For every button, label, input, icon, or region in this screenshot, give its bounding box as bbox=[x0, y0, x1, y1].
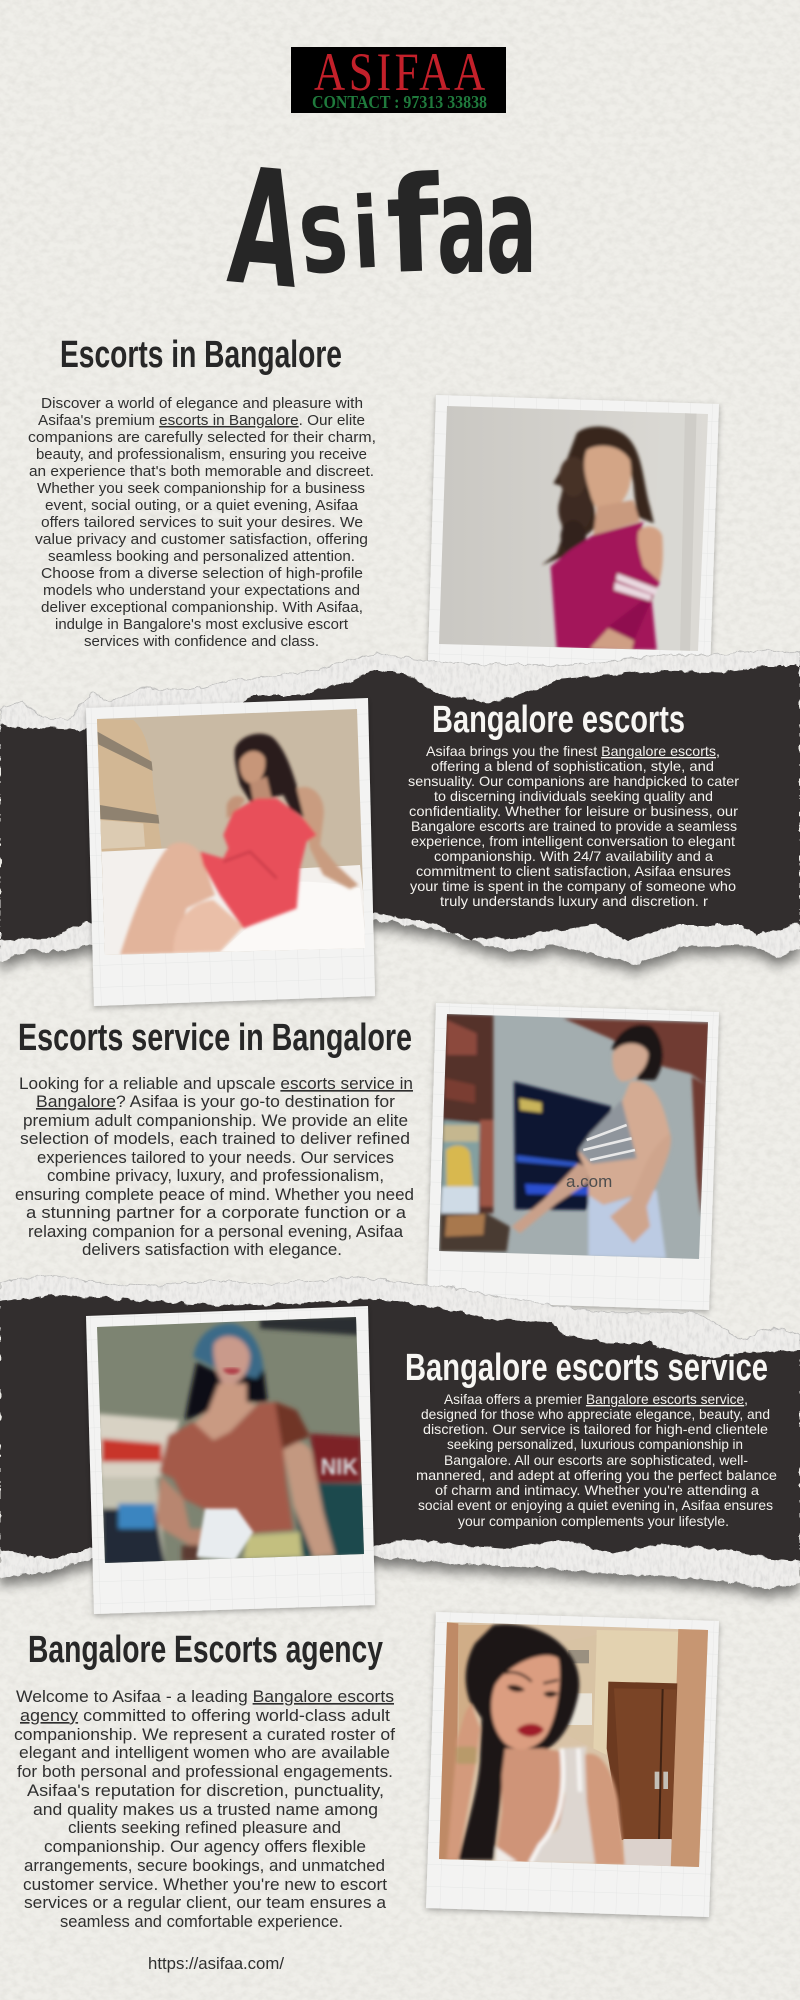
section 2 body text: confidentiality. Whether for leisure or business, our bbox=[409, 803, 738, 819]
section 3 body text: experiences tailored to your needs. Our services bbox=[37, 1149, 394, 1167]
torn band 1: paper strip top bbox=[0, 651, 800, 760]
section 5 body text: elegant and intelligent women who are available bbox=[19, 1744, 390, 1762]
website url: https://asifaa.com/ bbox=[148, 1955, 284, 1973]
section 3 heading: Escorts service in Bangalore bbox=[18, 1017, 412, 1059]
section 1 body text: indulge in Bangalore's most exclusive escort bbox=[55, 616, 349, 633]
logo banner: ASIFAA bbox=[314, 41, 485, 102]
logo banner: CONTACT : 97313 33838 bbox=[312, 92, 487, 112]
section 4 body text: Bangalore. All our escorts are sophisticated, well- bbox=[444, 1452, 748, 1468]
section 1 body text: Whether you seek companionship for a business bbox=[37, 480, 365, 497]
torn band 2: paper strip top bbox=[0, 1275, 800, 1390]
photo 1: woman in magenta top bbox=[439, 406, 708, 651]
section 1 body text: value privacy and customer satisfaction, offering bbox=[35, 531, 368, 548]
section 2 body text: to discerning individuals seeking quality and bbox=[434, 788, 713, 804]
section 3 body text: Looking for a reliable and upscale escorts service in bbox=[19, 1075, 413, 1093]
section 5 body text: for both personal and professional engagements. bbox=[17, 1763, 393, 1781]
section 4 body text: designed for those who appreciate elegance, beauty, and bbox=[421, 1406, 770, 1422]
section 4 body text: of charm and intimacy. Whether you're attending a bbox=[435, 1482, 759, 1498]
section 2 body text: offering a blend of sophistication, style, and bbox=[431, 758, 714, 774]
torn band 2: paper strip bottom bbox=[0, 1530, 800, 1589]
title: Asifaa: a bbox=[486, 146, 537, 304]
section 1 body text: seamless booking and personalized attention. bbox=[48, 548, 355, 565]
section 4 body text: discretion. Our service is tailored for high-end clientele bbox=[423, 1421, 768, 1437]
section 1 body text: models who understand your expectations and bbox=[43, 582, 360, 599]
section 1 body text: Discover a world of elegance and pleasure with bbox=[41, 395, 363, 412]
section 2 body text bbox=[408, 743, 739, 909]
section 5 body text: customer service. Whether you're new to escort bbox=[23, 1876, 387, 1894]
section 3 body text: combine privacy, luxury, and professionalism, bbox=[47, 1167, 384, 1185]
title: Asifaa: i bbox=[349, 177, 383, 292]
polaroid 2 bbox=[86, 698, 380, 1006]
section 3 body text: selection of models, each trained to deliver refined bbox=[20, 1130, 410, 1148]
section 2 body text: Bangalore escorts are trained to provide a seamless bbox=[411, 818, 737, 834]
section 5 body text: seamless and comfortable experience. bbox=[60, 1913, 343, 1931]
section 1 body text: companions are carefully selected for their charm, bbox=[28, 429, 376, 446]
photo 3: woman in striped bikini bbox=[439, 1014, 708, 1259]
section 4 body text: Asifaa offers a premier Bangalore escorts service, bbox=[444, 1391, 748, 1407]
section 1 body text: services with confidence and class. bbox=[84, 633, 319, 650]
section 1 body text: beauty, and professionalism, ensuring you receive bbox=[36, 446, 367, 463]
section 1 body text: Choose from a diverse selection of high-profile bbox=[41, 565, 363, 582]
torn band 1: paper strip bottom bbox=[0, 900, 800, 965]
section 3 body text bbox=[15, 1075, 414, 1259]
section 5 heading: Bangalore Escorts agency bbox=[28, 1629, 383, 1671]
section 1 body text: an experience that's both memorable and discreet. bbox=[29, 463, 374, 480]
logo banner bbox=[291, 41, 506, 113]
section 3 body text: ensuring complete peace of mind. Whether you need bbox=[15, 1186, 414, 1204]
section 1 body text: event, social outing, or a quiet evening, Asifaa bbox=[45, 497, 359, 514]
section 1 body text: offers tailored services to suit your desires. We bbox=[41, 514, 363, 531]
photo 2: woman in red dress bbox=[97, 709, 365, 955]
section 4 body text: seeking personalized, luxurious companionship in bbox=[447, 1436, 743, 1452]
section 5 body text: and quality makes us a trusted name among bbox=[33, 1801, 378, 1819]
section 1 body text: deliver exceptional companionship. With Asifaa, bbox=[41, 599, 363, 616]
title: Asifaa: a bbox=[437, 146, 488, 304]
section 5 body text: agency committed to offering world-class adult bbox=[20, 1707, 390, 1725]
section 2 body text: Asifaa brings you the finest Bangalore escorts, bbox=[426, 743, 720, 759]
section 3 body text: relaxing companion for a personal evening, Asifaa bbox=[28, 1223, 404, 1241]
section 5 body text: companionship. We represent a curated roster of bbox=[14, 1726, 395, 1744]
section 4 body text: your companion complements your lifestyle. bbox=[458, 1513, 729, 1529]
title: Asifaa: A bbox=[223, 133, 308, 325]
section 2 body text: commitment to client satisfaction, Asifaa ensures bbox=[416, 863, 731, 879]
section 5 body text bbox=[14, 1688, 395, 1931]
photo 4: woman in brown top bbox=[97, 1317, 364, 1563]
title: Asifaa: s bbox=[292, 160, 353, 302]
section 3 body text: a stunning partner for a corporate function or a bbox=[26, 1204, 407, 1222]
section 4 body text: mannered, and adept at offering you the perfect balance bbox=[416, 1467, 777, 1483]
photo 3: woman in striped bikini: a.com bbox=[566, 1172, 612, 1191]
section 4 body text bbox=[416, 1391, 777, 1529]
polaroid 4 bbox=[86, 1306, 380, 1614]
dark band 2 bbox=[0, 1296, 800, 1562]
section 2 body text: experience, from intelligent conversation to elegant bbox=[411, 833, 735, 849]
section 2 body text: companionship. With 24/7 availability and a bbox=[434, 848, 713, 864]
section 2 heading: Bangalore escorts bbox=[432, 699, 685, 741]
section 5 body text: clients seeking refined pleasure and bbox=[68, 1819, 341, 1837]
title: Asifaa: f bbox=[384, 147, 444, 303]
section 5 body text: Asifaa's reputation for discretion, punctuality, bbox=[27, 1782, 384, 1800]
section 1 heading: Escorts in Bangalore bbox=[60, 334, 342, 376]
photo 5: woman in white top bbox=[439, 1622, 708, 1867]
section 1 body text: Asifaa's premium escorts in Bangalore. Our elite bbox=[38, 412, 365, 429]
polaroid 5 bbox=[426, 1612, 720, 1917]
section 2 body text: sensuality. Our companions are handpicked to cater bbox=[408, 773, 739, 789]
section 5 body text: Welcome to Asifaa - a leading Bangalore escorts bbox=[16, 1688, 394, 1706]
section 5 body text: companionship. Our agency offers flexible bbox=[44, 1838, 366, 1856]
section 3 body text: premium adult companionship. We provide an elite bbox=[23, 1112, 408, 1130]
dark band 1 bbox=[0, 666, 800, 940]
section 3 body text: Bangalore ? Asifaa is your go-to destination for bbox=[36, 1093, 396, 1111]
photo 4: woman in brown top: NIK bbox=[321, 1454, 359, 1480]
section 2 body text: your time is spent in the company of someone who bbox=[410, 878, 736, 894]
section 1 body text bbox=[28, 395, 376, 650]
section 5 body text: arrangements, secure bookings, and unmatched bbox=[24, 1857, 385, 1875]
polaroid 3 bbox=[427, 1003, 720, 1310]
polaroid 1 bbox=[425, 394, 722, 666]
title: Asifaa bbox=[223, 133, 537, 325]
section 5 body text: services or a regular client, our team ensures a bbox=[24, 1894, 387, 1912]
section 3 body text: delivers satisfaction with elegance. bbox=[82, 1241, 342, 1259]
section 2 body text: truly understands luxury and discretion. r bbox=[440, 893, 708, 909]
section 4 body text: social event or enjoying a quiet evening in, Asifaa ensures bbox=[418, 1497, 773, 1513]
